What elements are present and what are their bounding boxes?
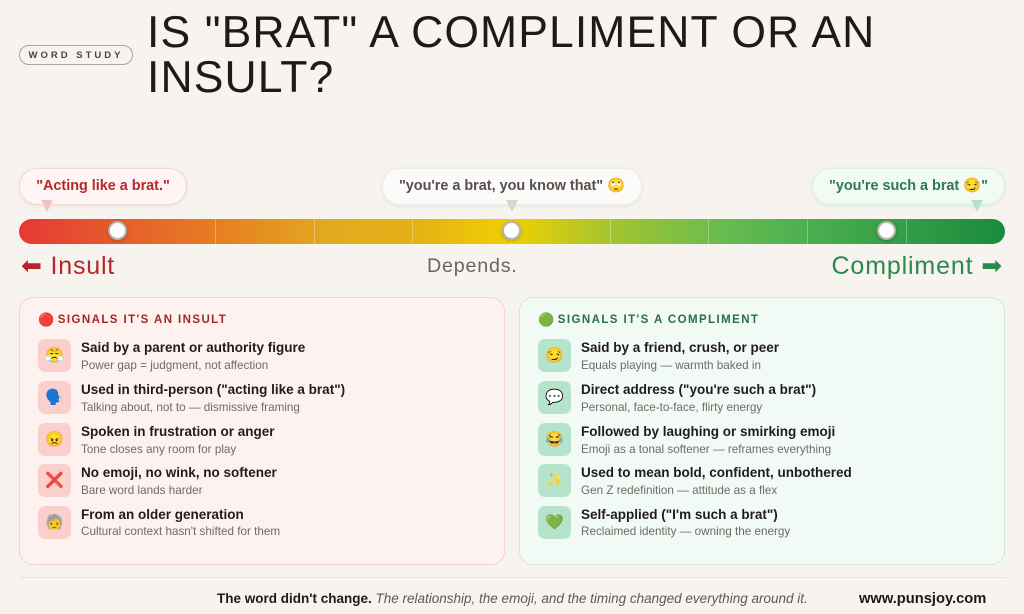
signal: friend or peer <box>538 339 779 372</box>
callout: compliment quote: "you're such a brat 😏" <box>829 178 988 194</box>
marker: insult position <box>108 221 127 240</box>
callout: neutral quote: "you're a brat, you know that" 🙄 <box>399 178 625 194</box>
signal: no emoji: ❌ <box>45 472 64 489</box>
signal: direct address <box>538 381 816 414</box>
signal: direct address: 💬 <box>545 389 564 406</box>
callout pointer: insult <box>41 200 53 212</box>
scale label: insult: ⬅ Insult <box>21 252 115 280</box>
panel: compliment signals <box>519 297 1005 565</box>
signal: self-applied: Self-applied ("I'm such a brat") <box>581 507 778 522</box>
signal: direct address: Direct address ("you're such a brat") <box>581 382 816 397</box>
marker: compliment position <box>877 221 896 240</box>
panel: insult signals <box>19 297 505 565</box>
signal: laughing emoji: Followed by laughing or smirking emoji <box>581 424 835 439</box>
signal: no emoji: Bare word lands harder <box>81 484 202 497</box>
scale label: depends: Depends. <box>427 255 518 277</box>
signal: parent or authority: 😤 <box>45 347 64 364</box>
title: INSULT? <box>147 53 334 102</box>
signal: third person: 🗣️ <box>45 389 64 406</box>
website credit: www.punsjoy.com <box>859 591 986 607</box>
signal: bold and confident: Used to mean bold, confident, unbothered <box>581 465 852 480</box>
signal: self-applied: Reclaimed identity — owning the energy <box>581 525 790 538</box>
panel heading: insult: 🔴 SIGNALS IT'S AN INSULT <box>38 312 227 327</box>
spectrum bar <box>19 219 1005 244</box>
signal: laughing emoji: Emoji as a tonal softener — reframes everything <box>581 443 831 456</box>
signal: no emoji: No emoji, no wink, no softener <box>81 465 277 480</box>
callout: compliment quote <box>812 168 1005 205</box>
signal: older generation: 🧓 <box>45 514 64 531</box>
signal: friend or peer: Equals playing — warmth baked in <box>581 359 761 372</box>
signal: older generation: From an older generation <box>81 507 244 522</box>
signal: self-applied <box>538 506 790 539</box>
callout: insult quote: "Acting like a brat." <box>36 178 170 194</box>
signal: bold and confident: Gen Z redefinition — attitude as a flex <box>581 484 777 497</box>
callout pointer: neutral <box>506 200 518 212</box>
signal: older generation: Cultural context hasn't shifted for them <box>81 525 280 538</box>
badge: word study: WORD STUDY <box>29 50 123 61</box>
signal: third person: Talking about, not to — dismissive framing <box>81 401 300 414</box>
scale label: compliment: Compliment ➡ <box>832 252 1003 280</box>
title: IS "BRAT" A COMPLIMENT OR AN <box>147 8 875 57</box>
signal: friend or peer: Said by a friend, crush, or peer <box>581 340 779 355</box>
marker: neutral position <box>502 221 521 240</box>
callout: neutral quote <box>382 168 642 205</box>
signal: parent or authority: Power gap = judgment, not affection <box>81 359 268 372</box>
footer statement: The word didn't change. The relationship, the emoji, and the timing changed everything around it. <box>217 591 808 606</box>
signal: laughing emoji <box>538 423 835 456</box>
signal: bold and confident: ✨ <box>545 472 564 489</box>
signal: parent or authority <box>38 339 305 372</box>
signal: frustration: Spoken in frustration or anger <box>81 424 275 439</box>
signal: laughing emoji: 😂 <box>545 431 564 448</box>
signal: frustration: Tone closes any room for play <box>81 443 236 456</box>
signal: frustration: 😠 <box>45 431 64 448</box>
signal: third person: Used in third-person ("acting like a brat") <box>81 382 345 397</box>
badge: word study <box>19 45 133 65</box>
signal: older generation <box>38 506 280 539</box>
callout: insult quote <box>19 168 187 205</box>
signal: bold and confident <box>538 464 852 497</box>
panel heading: compliment: 🟢 SIGNALS IT'S A COMPLIMENT <box>538 312 759 327</box>
title <box>147 8 875 102</box>
signal: friend or peer: 😏 <box>545 347 564 364</box>
signal: parent or authority: Said by a parent or authority figure <box>81 340 305 355</box>
signal: self-applied: 💚 <box>545 514 564 531</box>
signal: third person <box>38 381 345 414</box>
callout pointer: compliment <box>971 200 983 212</box>
signal: direct address: Personal, face-to-face, flirty energy <box>581 401 762 414</box>
signal: frustration <box>38 423 275 456</box>
signal: no emoji <box>38 464 277 497</box>
